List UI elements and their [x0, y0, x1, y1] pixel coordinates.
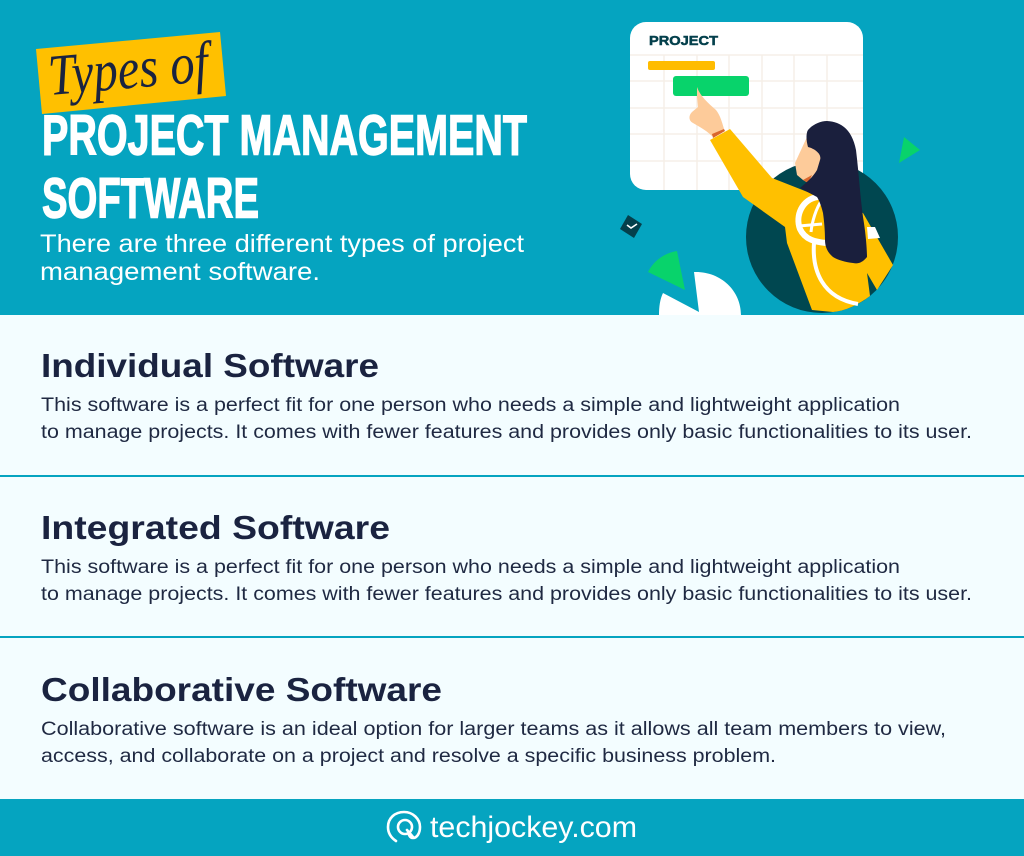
pie: white wedge — [659, 272, 741, 315]
hair — [800, 121, 867, 263]
hand — [689, 87, 724, 136]
subtitle: There are three different types of project — [40, 230, 524, 258]
subtitle: management software. — [40, 258, 320, 286]
triangle: right green — [899, 137, 920, 163]
section: collaborative software: Collaborative software is an ideal option for larger teams as it allows all team members to view, — [41, 719, 946, 740]
section: integrated software — [41, 509, 972, 605]
section: integrated software: Integrated Software — [41, 509, 390, 546]
woman: jacket — [710, 129, 893, 312]
check badge — [620, 215, 642, 238]
icon: techjockey logo — [388, 812, 420, 841]
section: individual software: to manage projects. It comes with fewer features and provides only basic functionalities to its user. — [41, 422, 972, 443]
title: SOFTWARE — [42, 166, 259, 230]
jacket white pattern — [798, 197, 858, 304]
dark circle — [746, 161, 898, 313]
section: individual software — [41, 347, 972, 443]
tag: types of: Types of — [45, 29, 216, 108]
section: collaborative software — [41, 671, 946, 767]
section: collaborative software: Collaborative Software — [41, 671, 442, 708]
section: integrated software: This software is a perfect fit for one person who needs a simple and lightweight application — [41, 557, 900, 578]
project board — [630, 22, 863, 190]
project board: PROJECT — [649, 33, 718, 48]
illustration: project chart and woman — [620, 22, 920, 315]
ear — [810, 152, 820, 162]
section: integrated software: to manage projects. It comes with fewer features and provides only basic functionalities to its user. — [41, 584, 972, 605]
section: collaborative software: access, and collaborate on a project and resolve a specific business problem. — [41, 746, 776, 767]
jacket white band — [867, 227, 880, 239]
content background — [0, 315, 1024, 799]
subtitle — [40, 230, 524, 286]
neck and face — [795, 137, 830, 183]
footer: techjockey.com — [430, 811, 637, 844]
pie: green wedge — [648, 251, 685, 290]
footer — [0, 799, 1024, 856]
section: individual software: Individual Software — [41, 347, 379, 384]
title — [42, 104, 527, 230]
section: individual software: This software is a perfect fit for one person who needs a simple and lightweight application — [41, 395, 900, 416]
title: PROJECT MANAGEMENT — [42, 104, 527, 168]
header panel — [0, 0, 1024, 315]
